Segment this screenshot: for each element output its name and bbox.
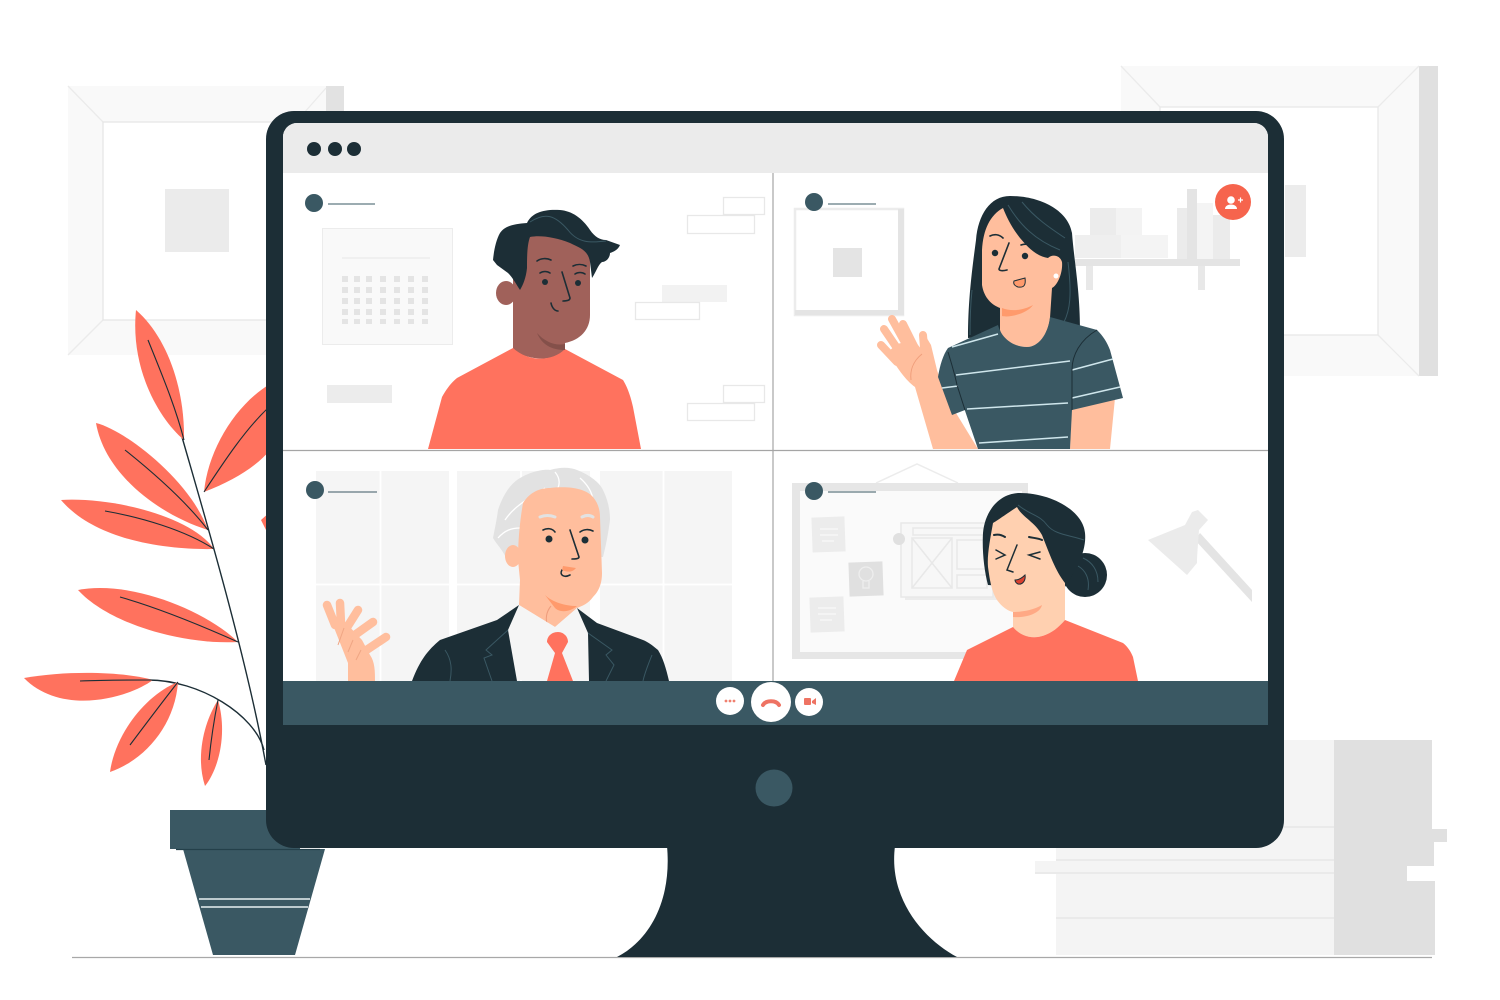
face features [990,235,1034,287]
white shirt [517,605,589,680]
chin shadow [1013,605,1042,617]
face features [543,529,593,576]
hair [983,493,1085,590]
webcam dot on monitor chin [756,770,792,806]
ear [496,281,516,305]
calendar on wall [322,228,452,344]
windows [316,471,732,681]
end call button [751,682,791,722]
ear [505,545,521,567]
hair [493,210,620,290]
pin board [792,483,1028,659]
waving arm and hand [881,319,978,449]
sticky note [809,596,845,633]
eyebrows [540,516,593,517]
background: right picture frame [1121,66,1438,376]
grey hair [493,468,610,560]
background: left picture frame [68,86,344,355]
avatar and name [805,482,876,500]
earring [1054,274,1058,278]
chin shadow and wrinkles [545,595,577,611]
wall bricks [636,198,764,420]
man figure [327,468,669,681]
plant pot [170,810,325,955]
hair strands [970,202,1070,335]
background: stack of books [1035,740,1447,955]
head and neck [513,227,590,359]
chin shadow [1002,305,1033,316]
wireframe sheet [893,523,1000,600]
man figure [428,210,641,449]
monitor stand [617,846,957,957]
face features [537,259,586,311]
wall sign [327,385,392,403]
sleeve seams [948,330,1097,410]
neck and face [982,208,1062,347]
hair bun [1063,553,1107,597]
desk lamp [1148,510,1252,602]
long hair [968,196,1080,338]
monitor screen [283,123,1268,725]
shirt stripes [942,334,1120,443]
plant stems [148,437,266,765]
hair strand [530,216,606,242]
suit jacket [412,605,669,681]
red tie [547,632,573,681]
framed picture [795,209,904,315]
panel dividers [283,173,1268,681]
camera button [795,688,823,716]
avatar and name [305,194,375,212]
head and neck [518,487,602,627]
panel 3: older man in suit [306,468,732,681]
avatar and name [306,481,377,499]
neck and face [988,507,1065,637]
right forearm [1070,398,1115,449]
shelf with books [1075,189,1240,290]
avatar and name [805,193,876,211]
panel 1: man in orange shirt [305,194,764,449]
woman figure [954,493,1138,681]
woman figure [881,196,1123,449]
sticky note with light bulb [848,561,884,597]
call toolbar [283,681,1268,725]
orange shirt [954,620,1138,681]
leaves [24,310,270,786]
sticky note [811,516,846,553]
window dots [307,142,361,156]
add user button [1215,184,1251,220]
window title bar [283,123,1268,173]
panel 2: woman in striped shirt [795,184,1251,449]
shirt [428,348,641,449]
chin shadow [537,333,565,350]
ground line [72,956,1432,958]
leaf ribs [80,340,268,760]
lapel lines [445,630,652,681]
monitor body [266,111,1284,848]
face features [994,535,1042,584]
raised hand [327,603,386,681]
panel 4: woman with hair bun [792,464,1252,681]
hanging string [876,464,958,483]
striped shirt [938,317,1123,449]
more options button [716,687,744,715]
plant [24,310,270,786]
hair strands [1018,505,1098,590]
